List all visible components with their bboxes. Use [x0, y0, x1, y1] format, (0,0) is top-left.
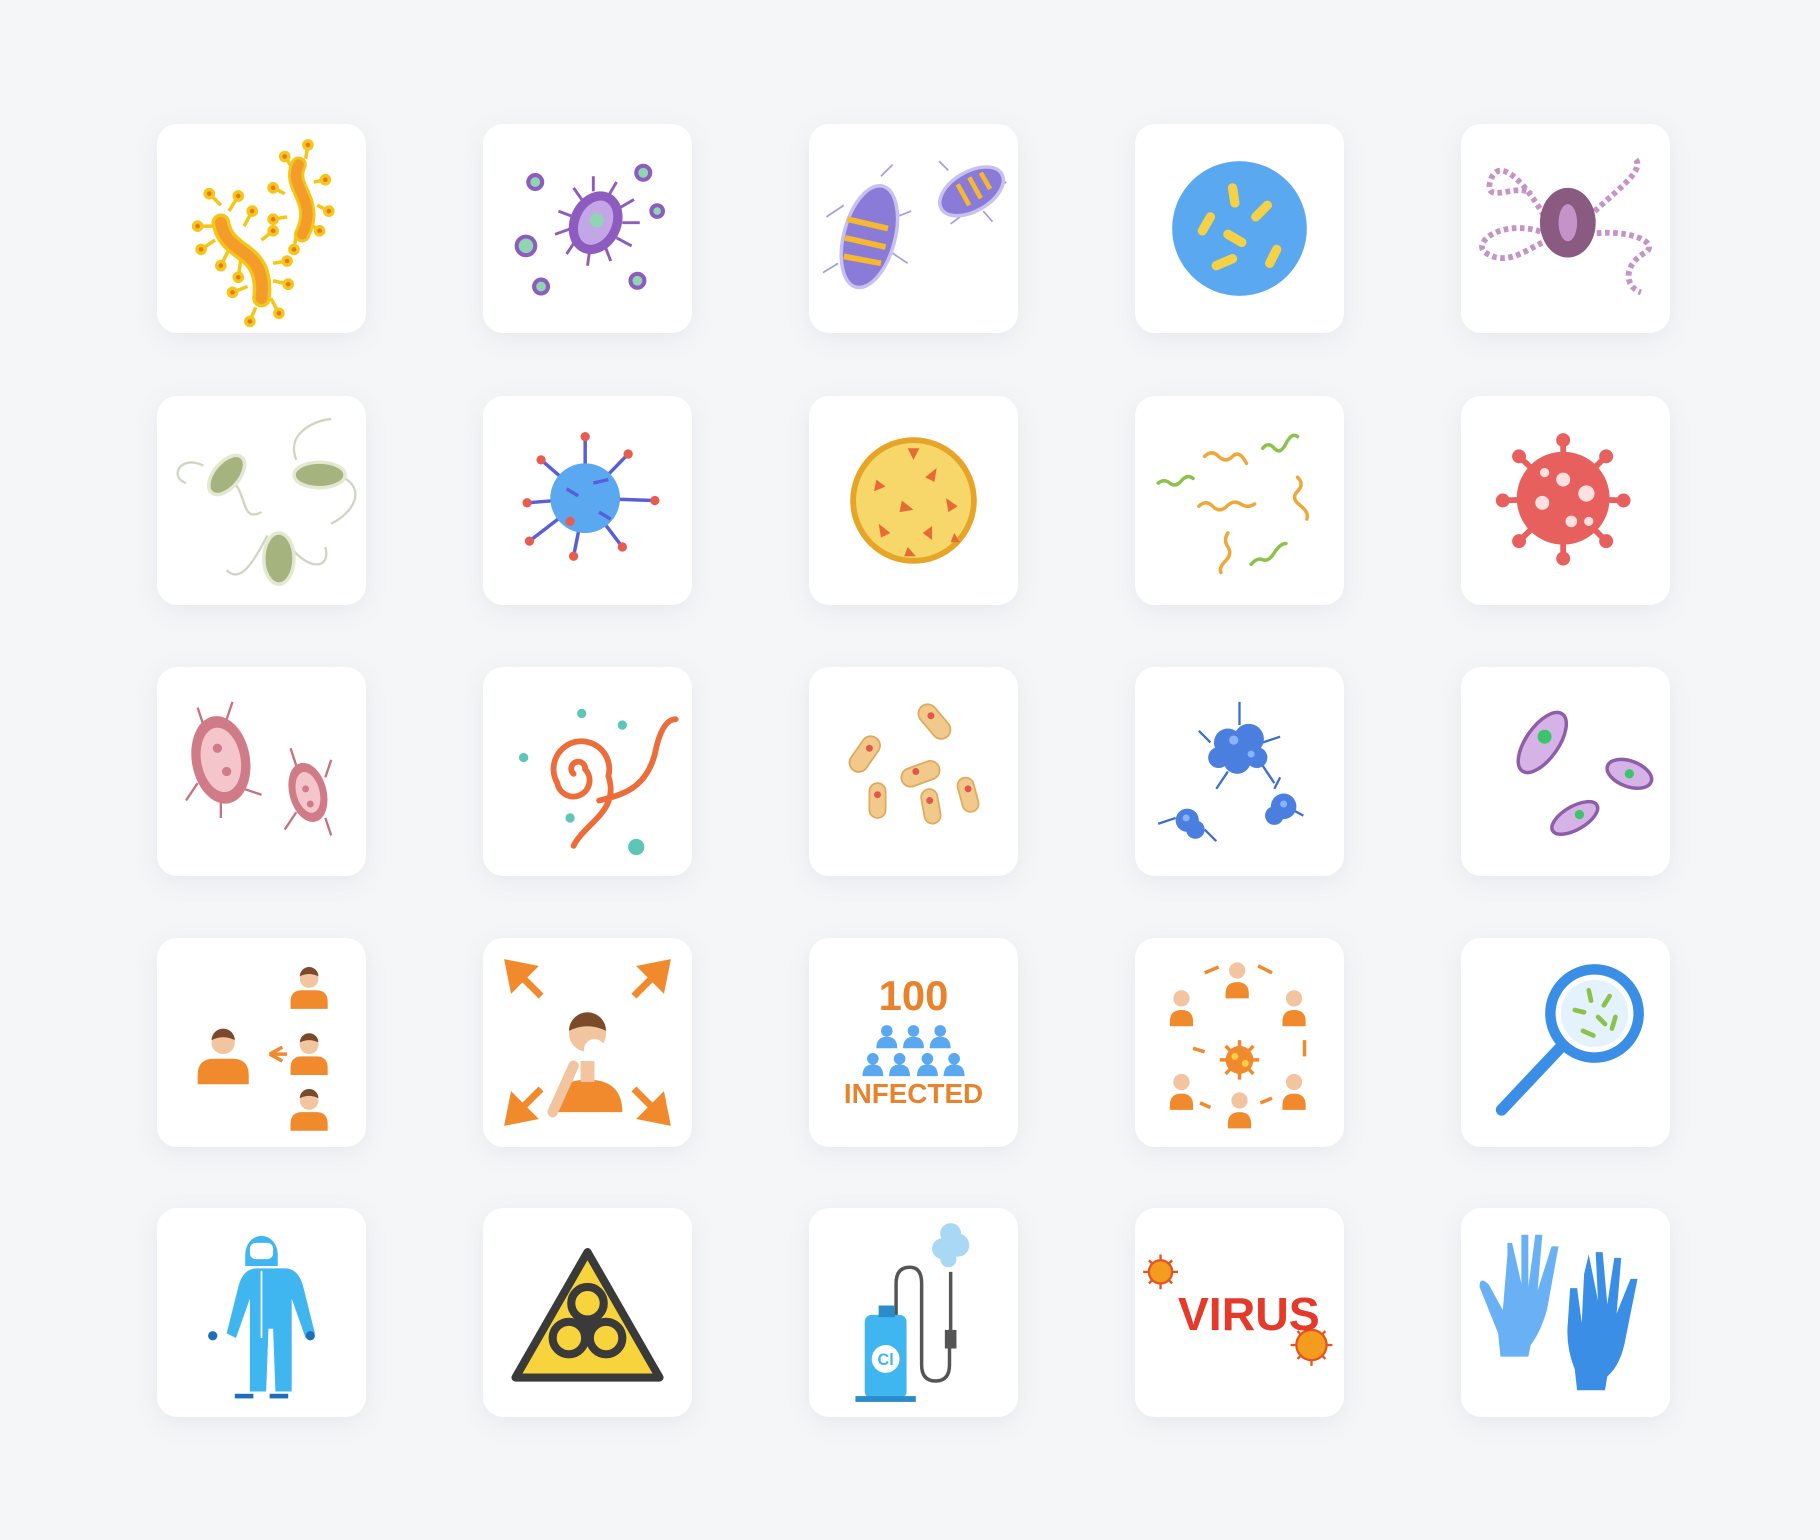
card: purple spore	[1461, 124, 1670, 333]
card: 100 infected: 100	[879, 972, 948, 1019]
card: hazmat suit	[157, 1208, 366, 1417]
card: sprayer	[809, 1208, 1018, 1417]
card: orange bacteria	[157, 124, 366, 333]
card: worms	[1135, 396, 1344, 605]
card: magnifier	[1461, 938, 1670, 1147]
card: blue petri	[1135, 124, 1344, 333]
card: tan rods	[809, 667, 1018, 876]
card: virus text: VIRUS	[1178, 1288, 1320, 1340]
card: blue clusters	[1135, 667, 1344, 876]
card: purple green bacteria	[1461, 667, 1670, 876]
card: red coronavirus	[1461, 396, 1670, 605]
card: striped bacteria	[809, 124, 1018, 333]
card: purple germ	[483, 124, 692, 333]
card: pink bacteria	[157, 667, 366, 876]
card: green bacteria	[157, 396, 366, 605]
card: 100 infected	[809, 938, 1018, 1147]
card: biohazard	[483, 1208, 692, 1417]
card: transmission circle	[1135, 938, 1344, 1147]
card: yellow cell	[809, 396, 1018, 605]
card: orange spiral	[483, 667, 692, 876]
card: person arrows	[483, 938, 692, 1147]
card: virus text	[1135, 1208, 1344, 1417]
card: blue spiky virus	[483, 396, 692, 605]
card: gloves	[1461, 1208, 1670, 1417]
card: sneezing to people	[157, 938, 366, 1147]
card: 100 infected: INFECTED	[844, 1078, 983, 1109]
card: sprayer: Cl	[878, 1351, 894, 1369]
